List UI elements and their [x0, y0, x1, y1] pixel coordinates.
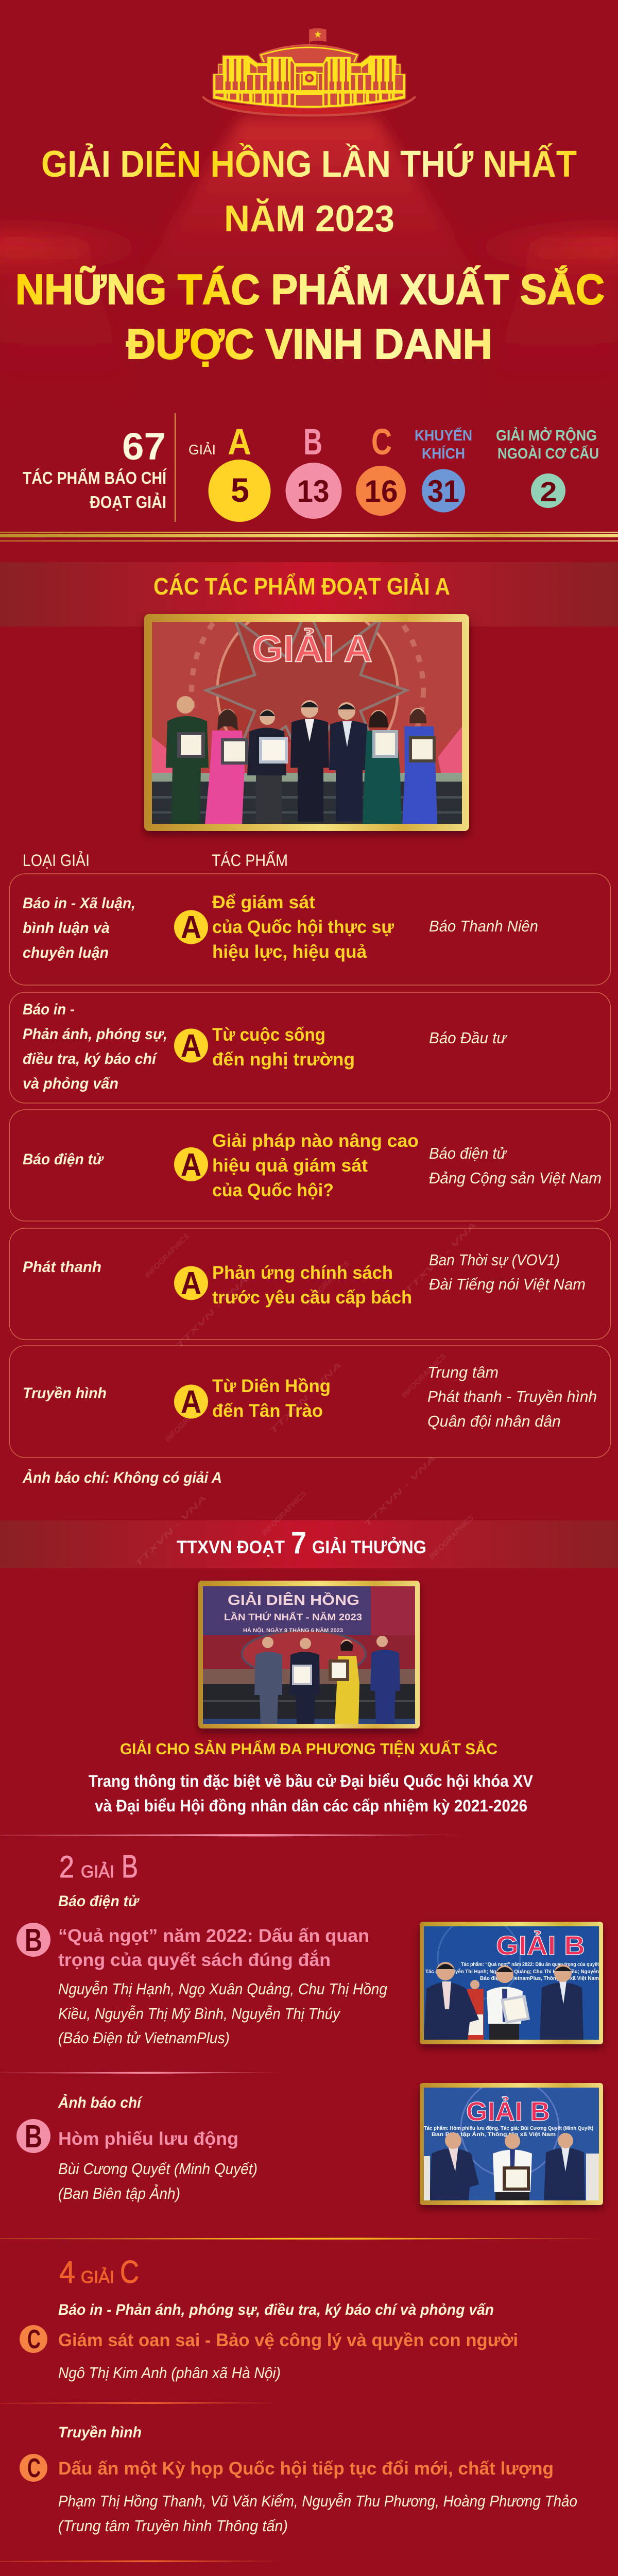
- man holding certificate: [289, 1638, 320, 1724]
- multimedia prize description: và Đại biểu Hội đồng nhân dân các cấp nhiệm kỳ 2021-2026: [95, 1797, 527, 1815]
- photo: prize B, Hòm phiếu lưu động: Tác phẩm: Hòm phiếu lưu động. Tác giả: Bùi Cương Quyết (Minh Quyết): [424, 2125, 593, 2131]
- text: INFOGRAPHICS: [303, 1259, 351, 1307]
- work: Quả ngọt: trọng của quyết sách đúng đắn: [58, 1950, 331, 1970]
- row: Truyền hình: Trung tâm: [427, 1363, 499, 1381]
- photo: prize A winners: GIẢI A: [252, 628, 372, 670]
- authors: Quả ngọt: Nguyễn Thị Hạnh, Ngọ Xuân Quảng, Chu Thị Hồng: [58, 1980, 387, 1998]
- man in dark jacket: [247, 709, 288, 824]
- text: INFOGRAPHICS: [427, 1513, 475, 1561]
- row: Báo in - Phản ánh: [9, 992, 611, 1103]
- row: Phát thanh: Ban Thời sự (VOV1): [429, 1251, 560, 1269]
- table header: work: TÁC PHẨM: [212, 851, 288, 870]
- consolation prize count: [415, 427, 472, 512]
- row: Phát thanh: Phản ứng chính sách: [212, 1263, 393, 1283]
- section heading band: TTXVN 7 prizes: [0, 1520, 618, 1568]
- badge C: C: [27, 2325, 41, 2354]
- photo: prize B, Quả ngọt: Báo điện tử VietnamPlus, Thông tấn xã Việt Nam: [480, 1975, 599, 1981]
- text: TTXVN - VNA: [175, 1275, 250, 1350]
- note: no prize A for press photos: Ảnh báo chí: Không có giải A: [22, 1469, 222, 1486]
- man in navy suit, left: [430, 2132, 479, 2200]
- photo: prize B, Hòm phiếu lưu động: [420, 2079, 603, 2205]
- man in grey suit: [254, 1637, 282, 1724]
- badge A: [174, 1384, 208, 1420]
- woman in pink: [205, 709, 248, 824]
- work: Hòm phiếu lưu động: Hòm phiếu lưu động: [58, 2129, 238, 2149]
- number 67: 67: [122, 425, 166, 468]
- section heading band: TTXVN 7 prizes: 7: [291, 1526, 306, 1560]
- badge B: [16, 1923, 50, 1958]
- row: Báo điện tử: của Quốc hội?: [212, 1180, 334, 1200]
- row: Báo in - Phản ánh: đến nghị trường: [212, 1049, 355, 1070]
- badge C: [20, 2453, 47, 2483]
- heading: 2 prize B: GIẢI: [81, 1862, 114, 1881]
- caption line 2: ĐOẠT GIẢI: [90, 493, 166, 512]
- multimedia prize heading: GIẢI CHO SẢN PHẨM ĐA PHƯƠNG TIỆN XUẤT SẮC: [120, 1739, 497, 1758]
- prize A count: A: [228, 422, 251, 463]
- heading: 2 prize B: [59, 1849, 138, 1885]
- prize B count: [285, 422, 342, 519]
- heading: 4 prize C: C: [120, 2255, 139, 2290]
- heading: 4 prize C: 4: [59, 2255, 75, 2290]
- row: Truyền hình: Quân đội nhân dân: [427, 1412, 561, 1430]
- photo: prize B, Quả ngọt: [420, 1917, 603, 2044]
- row: Báo điện tử: [9, 1110, 611, 1221]
- authors: Dấu ấn một Kỳ họp: [58, 2492, 577, 2535]
- category: electronic newspaper: Báo điện tử: [58, 1893, 140, 1910]
- photo: prize B, Quả ngọt: Tác phẩm: “Quả ngọt” năm 2022: Dấu ấn quan trọng của quyết: [461, 1961, 599, 1968]
- man in navy suit, left: [424, 1962, 479, 2040]
- row: Báo điện tử: Báo điện tử: [23, 1151, 104, 1168]
- row: Báo in - Xã luận: Báo Thanh Niên: [429, 917, 538, 935]
- photo: multimedia prize: LẦN THỨ NHẤT - NĂM 2023: [224, 1612, 362, 1622]
- badge A: [174, 1147, 208, 1183]
- section heading band: prize A: [0, 562, 618, 626]
- man in navy suit, right: [540, 1964, 583, 2040]
- text: INFOGRAPHICS: [260, 1489, 308, 1537]
- row: Báo in - Xã luận: hiệu lực, hiệu quả: [212, 942, 367, 962]
- text: TTXVN - VNA: [133, 1494, 209, 1569]
- badge A: A: [181, 1028, 201, 1064]
- heading: 2 prize B: B: [122, 1849, 138, 1885]
- category: television (prize C): Truyền hình: [58, 2424, 142, 2441]
- heading: 4 prize C: GIẢI: [81, 2267, 114, 2286]
- category: press photo (prize B): Ảnh báo chí: [58, 2094, 143, 2111]
- authors: Dấu ấn một Kỳ họp: (Trung tâm Truyền hình Thông tấn): [58, 2517, 288, 2535]
- photo: multimedia prize: HÀ NỘI, NGÀY 9 THÁNG 6 NĂM 2023: [243, 1627, 343, 1634]
- multimedia prize description: Trang thông tin đặc biệt về bầu cử Đại biểu Quốc hội khóa XV: [89, 1772, 534, 1790]
- extended prize count: [496, 427, 599, 508]
- row: Báo điện tử: hiệu quả giám sát: [212, 1156, 368, 1176]
- heading: 4 prize C: [59, 2255, 139, 2290]
- photo: prize B, Hòm phiếu lưu động: GIẢI B: [466, 2096, 550, 2127]
- authors: Quả ngọt: Kiều, Nguyễn Thị Mỹ Bình, Nguyễn Thị Thúy: [58, 2005, 341, 2023]
- authors: Quả ngọt: (Báo Điện tử VietnamPlus): [58, 2029, 230, 2047]
- photo: multimedia prize: GIẢI DIÊN HỒNG: [228, 1591, 359, 1608]
- caption line 1: TÁC PHẨM BÁO CHÍ: [23, 468, 167, 487]
- badge B: B: [25, 1923, 42, 1958]
- text: INFOGRAPHICS: [143, 1232, 191, 1280]
- row: Báo in - Phản ánh: Báo in -: [23, 1001, 75, 1018]
- heading: 2 prize B: 2: [59, 1850, 74, 1884]
- row: Truyền hình: đến Tân Trào: [212, 1401, 323, 1421]
- row: Báo điện tử: Đảng Cộng sản Việt Nam: [429, 1169, 602, 1187]
- badge A: [174, 1028, 208, 1064]
- row: Báo in - Phản ánh: Từ cuộc sống: [212, 1025, 325, 1045]
- badge A: [174, 1266, 208, 1301]
- badge A: A: [181, 1266, 201, 1301]
- prize A count: [208, 422, 271, 522]
- row: Báo in - Xã luận: chuyên luận: [23, 944, 109, 961]
- row: Phát thanh: Đài Tiếng nói Việt Nam: [429, 1275, 586, 1293]
- row: Phát thanh: trước yêu cầu cấp bách: [212, 1287, 412, 1308]
- prize C count: C: [371, 422, 392, 463]
- consolation prize count: 31: [427, 474, 459, 509]
- text: TTXVN - VNA: [363, 1454, 438, 1529]
- row: Truyền hình: [9, 1346, 611, 1458]
- prize B count: B: [303, 422, 322, 463]
- work: Dấu ấn một Kỳ họp: Dấu ấn một Kỳ họp Quốc hội tiếp tục đổi mới, chất lượng: [58, 2459, 554, 2479]
- photo: prize B, Quả ngọt: Tác giả: Nguyễn Thị Hạnh; Ngọ Xuân Quảng; Chu Thị Hồng Kiều; Nguyễn: [425, 1968, 599, 1975]
- extended prize count: NGOÀI CƠ CẤU: [497, 445, 599, 462]
- work: Quả ngọt: “Quả ngọt” năm 2022: Dấu ấn quan: [58, 1926, 369, 1946]
- row: Truyền hình: Truyền hình: [23, 1385, 107, 1402]
- authors: Quả ngọt: [58, 1980, 387, 2047]
- consolation prize count: KHÍCH: [422, 445, 465, 462]
- consolation prize count: KHUYẾN: [415, 427, 472, 444]
- woman in yellow: [329, 1639, 359, 1724]
- prize C count: 16: [365, 474, 398, 509]
- row: Báo in - Xã luận: Báo in - Xã luận,: [23, 895, 135, 912]
- authors: Hòm phiếu lưu động: (Ban Biên tập Ảnh): [58, 2184, 180, 2202]
- row: Báo điện tử: Giải pháp nào nâng cao: [212, 1131, 419, 1151]
- photo: prize B, Hòm phiếu lưu động: Ban Biên tập Ảnh, Thông tấn xã Việt Nam: [432, 2131, 556, 2138]
- label: giải: GIẢI: [188, 441, 216, 457]
- title: [15, 143, 605, 368]
- stats: 67 award-winning works: [23, 413, 599, 522]
- text: INFOGRAPHICS: [163, 1396, 211, 1444]
- authors: Hòm phiếu lưu động: Bùi Cương Quyết (Minh Quyết): [58, 2160, 258, 2178]
- text: TTXVN - VNA: [403, 1221, 478, 1296]
- row: Báo in - Phản ánh: và phỏng vấn: [23, 1075, 118, 1092]
- badge C: [20, 2325, 47, 2354]
- badge A: A: [181, 1384, 201, 1420]
- man in white shirt: [493, 2133, 532, 2200]
- row: Báo in - Phản ánh: điều tra, ký báo chí: [23, 1050, 158, 1067]
- row: Báo in - Xã luận: [9, 874, 611, 985]
- soldier: [166, 696, 209, 824]
- row: Truyền hình: Phát thanh - Truyền hình: [427, 1387, 597, 1405]
- authors: Hòm phiếu lưu động: [58, 2160, 258, 2202]
- section heading band: prize A: CÁC TÁC PHẨM ĐOẠT GIẢI A: [153, 573, 450, 600]
- badge A: A: [181, 910, 201, 945]
- section heading band: TTXVN 7 prizes: GIẢI THƯỞNG: [312, 1537, 426, 1557]
- row: Báo in - Phản ánh: Báo Đầu tư: [429, 1029, 507, 1047]
- row: Báo in - Phản ánh: Phản ánh, phóng sự,: [23, 1026, 167, 1043]
- row: Báo in - Xã luận: bình luận và: [23, 920, 110, 937]
- photo: prize A winners: [144, 574, 469, 831]
- row: Báo in - Xã luận: của Quốc hội thực sự: [212, 917, 394, 937]
- row: Truyền hình: Từ Diên Hồng: [212, 1376, 331, 1396]
- man in navy suit, right: [544, 2133, 585, 2200]
- author: Giám sát oan sai: Ngô Thị Kim Anh (phân xã Hà Nội): [58, 2364, 281, 2382]
- category: print, reportage (prize C): Báo in - Phản ánh, phóng sự, điều tra, ký báo chí và phỏng vấn: [58, 2301, 494, 2318]
- woman in blue: [402, 708, 437, 824]
- row: Phát thanh: [9, 1228, 611, 1340]
- row: Báo in - Xã luận: Để giám sát: [212, 892, 315, 912]
- man in blue suit: [370, 1636, 400, 1724]
- multimedia prize description: [89, 1772, 534, 1815]
- section heading band: TTXVN 7 prizes: TTXVN ĐOẠT: [177, 1537, 285, 1557]
- title line 2: NĂM 2023: [224, 198, 394, 240]
- badge B: [16, 2119, 50, 2155]
- icon: National Assembly building: [202, 28, 416, 115]
- extended prize count: GIẢI MỞ RỘNG: [496, 427, 597, 444]
- title line 4: ĐƯỢC VINH DANH: [126, 320, 492, 368]
- row: Báo điện tử: Báo điện tử: [429, 1144, 507, 1162]
- prize C count: [356, 422, 406, 516]
- icon: National Assembly building: ★: [314, 30, 322, 39]
- photo: multimedia prize: [198, 1581, 420, 1728]
- title line 1: GIẢI DIÊN HỒNG LẦN THỨ NHẤT: [41, 143, 577, 185]
- prize A count: 5: [231, 471, 249, 509]
- badge B: B: [25, 2119, 42, 2155]
- man in dark suit, centre right: [329, 702, 368, 822]
- badge A: A: [181, 1147, 201, 1183]
- woman in green: [363, 710, 402, 824]
- row: Phát thanh: Phát thanh: [23, 1259, 101, 1276]
- photo: prize B, Quả ngọt: GIẢI B: [496, 1930, 585, 1961]
- table header: prize type: LOẠI GIẢI: [23, 851, 90, 870]
- badge A: [174, 910, 208, 945]
- text: TTXVN - VNA: [268, 1361, 344, 1436]
- badge C: C: [27, 2453, 41, 2483]
- background woman in red: [467, 1980, 484, 2040]
- work: Quả ngọt: [58, 1926, 369, 1970]
- work: Giám sát oan sai: Giám sát oan sai - Bảo vệ công lý và quyền con người: [58, 2330, 518, 2350]
- man in white shirt: [487, 1965, 530, 2040]
- extended prize count: 2: [540, 477, 557, 507]
- text: INFOGRAPHICS: [400, 1352, 448, 1400]
- man in dark suit, centre left: [290, 700, 329, 822]
- prize B count: 13: [297, 474, 330, 509]
